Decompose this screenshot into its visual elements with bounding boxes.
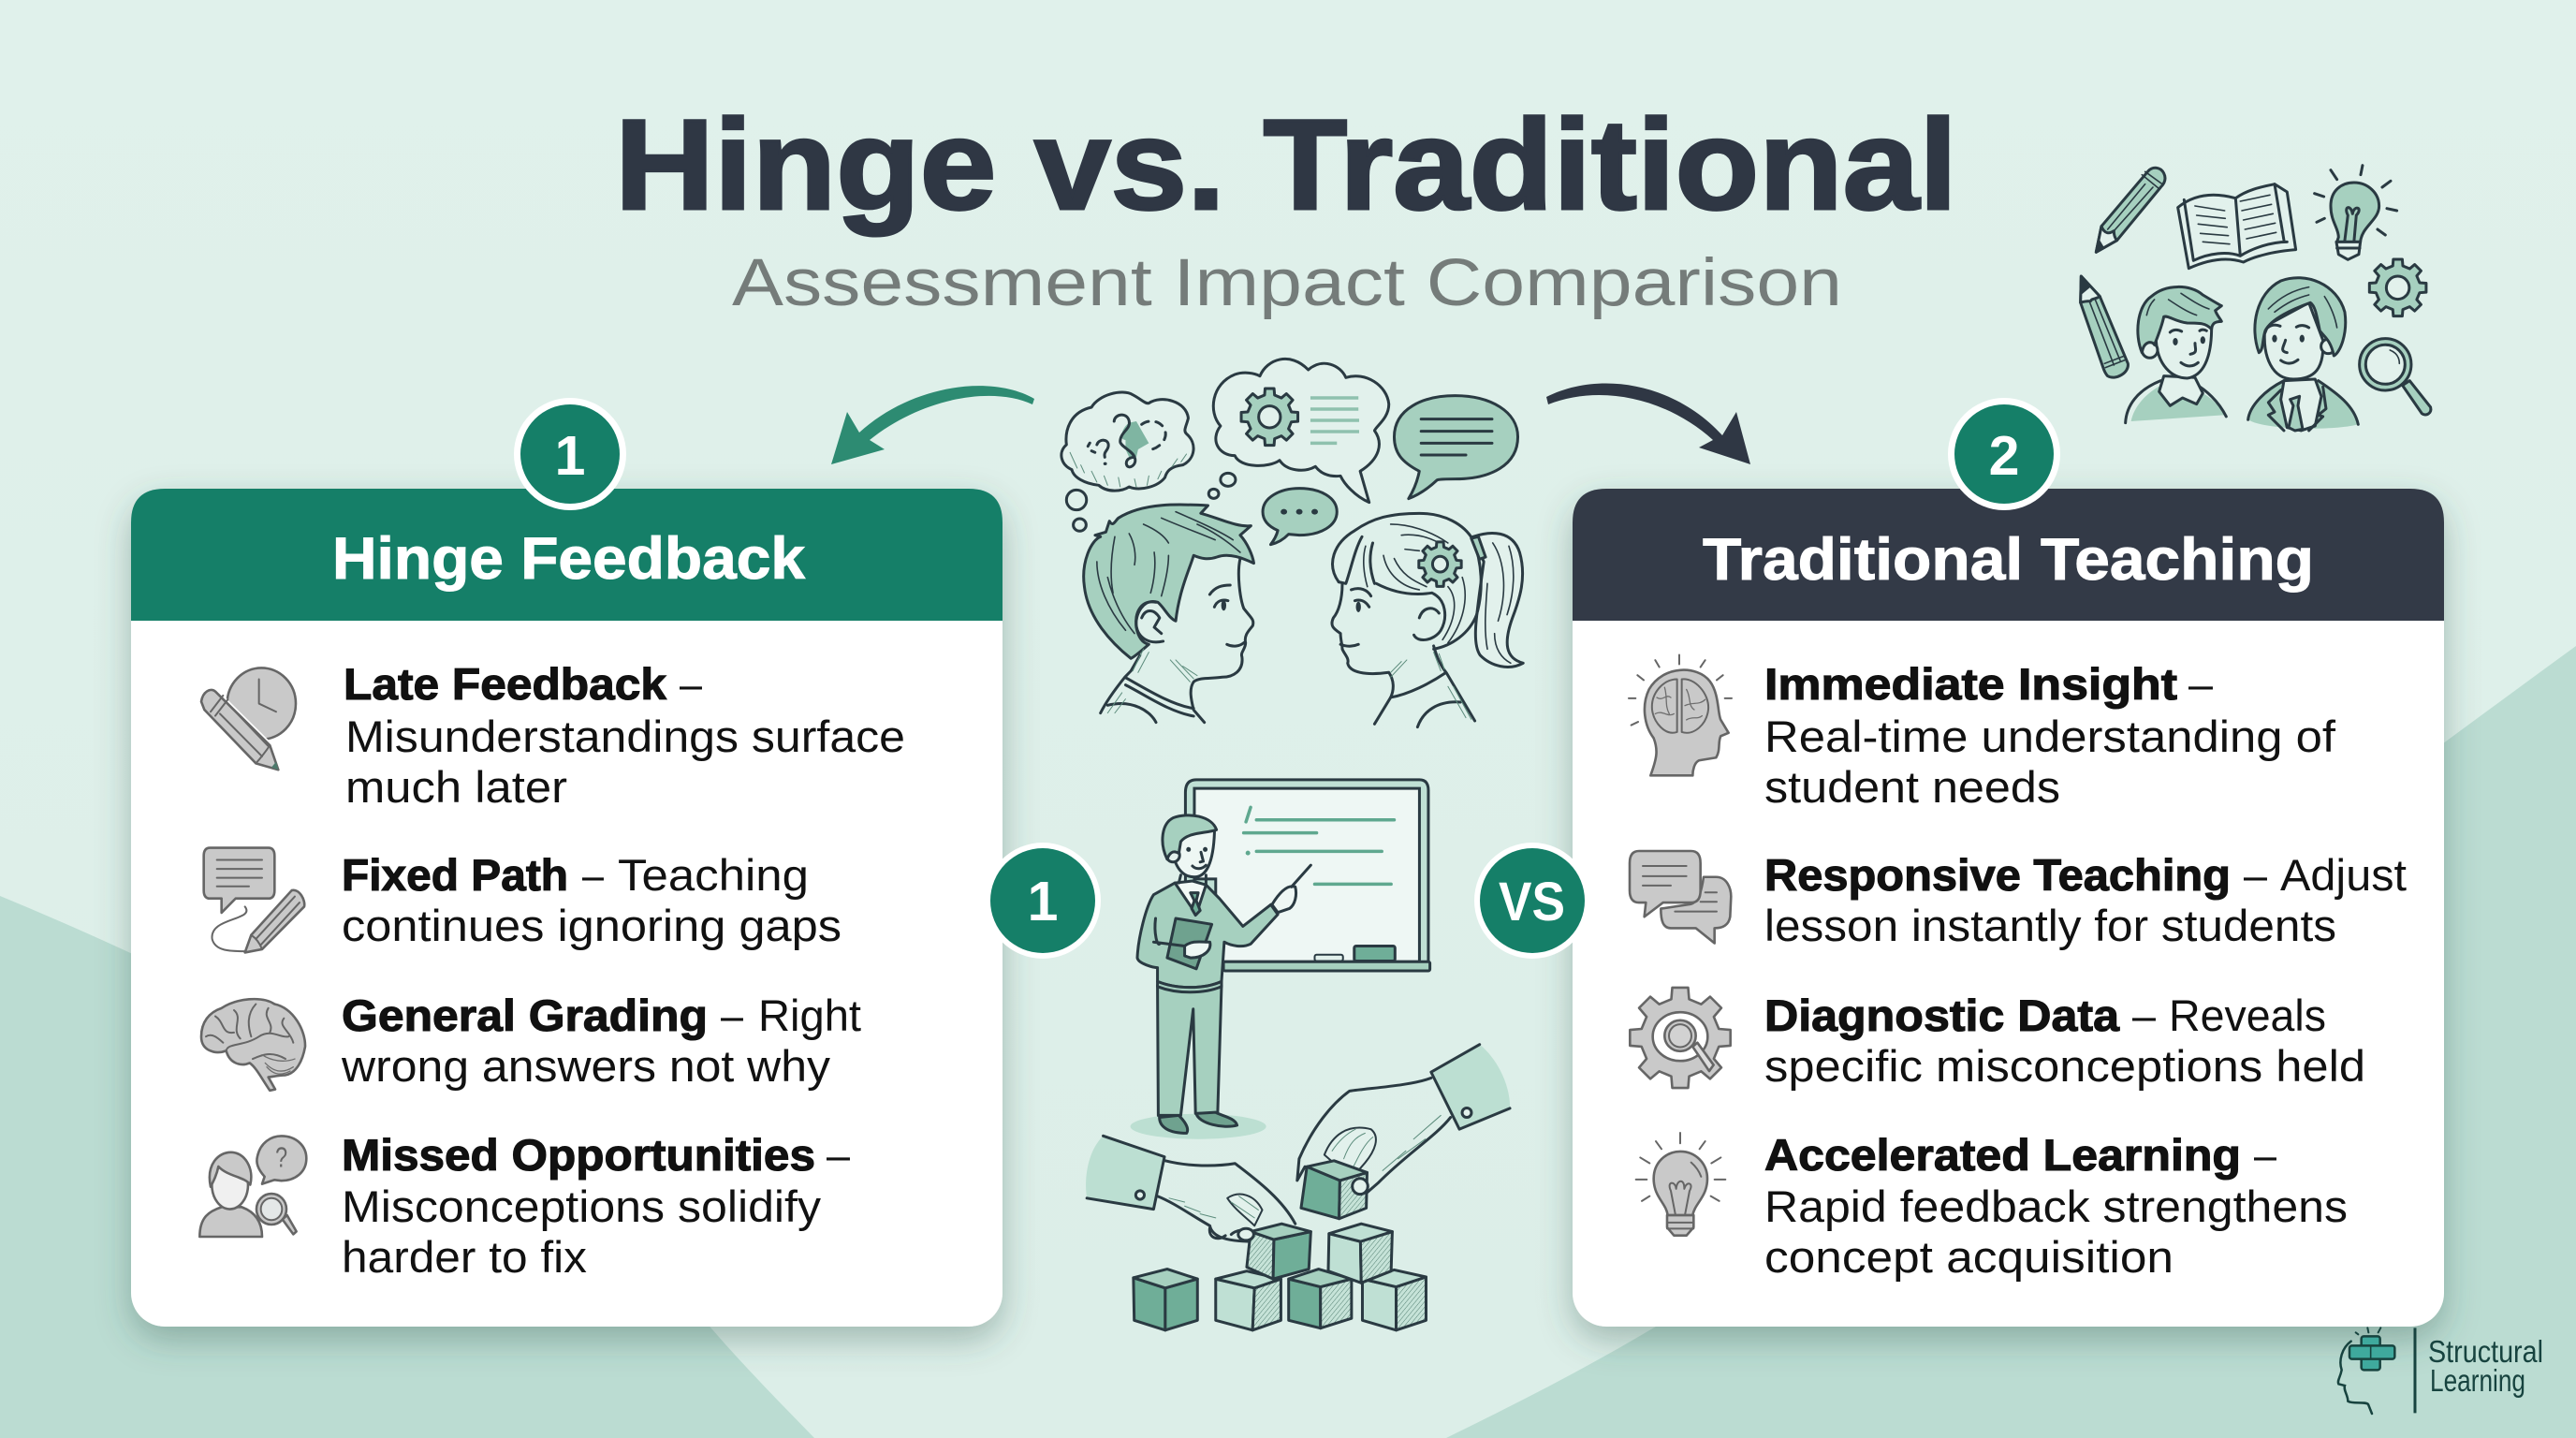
item: General Grading: General Grading — [342, 990, 708, 1040]
icon: light bulb — [2315, 166, 2397, 259]
item: Responsive Teaching: Adjust — [2280, 850, 2407, 900]
subtitle: Assessment Impact Comparison — [732, 246, 1842, 320]
item: Accelerated Learning: concept acquisition — [1764, 1232, 2174, 1282]
item: Immediate Insight — [1629, 655, 2336, 812]
header: Hinge Feedback: Hinge Feedback — [332, 526, 806, 592]
item: Immediate Insight: Real-time understanding of — [1764, 712, 2336, 761]
icon: teacher — [2248, 278, 2358, 431]
illustration: two children with speech bubbles — [1061, 359, 1523, 727]
arrow: to Hinge Feedback — [831, 386, 1034, 464]
arrow: to Traditional Teaching — [1546, 384, 1750, 464]
item: General Grading: wrong answers not why — [341, 1041, 831, 1091]
logo: Structural Learning: Learning — [2430, 1363, 2525, 1398]
item: Responsive Teaching: Responsive Teaching — [1764, 850, 2231, 900]
header: Hinge Feedback — [131, 489, 1003, 621]
badge: 2 above Traditional Teaching: 2 — [1989, 425, 2019, 487]
item: Missed Opportunities: – — [827, 1130, 851, 1180]
teacher figure — [1131, 815, 1310, 1139]
hand right with cuff — [1297, 1045, 1510, 1195]
item: Fixed Path: continues ignoring gaps — [342, 901, 842, 950]
item: Late Feedback: Late Feedback — [344, 659, 667, 709]
item: Missed Opportunities: harder to fix — [342, 1232, 587, 1282]
item: Late Feedback: Misunderstandings surface — [345, 712, 905, 761]
icon: gear with magnifier — [1630, 988, 1731, 1088]
boy profile — [1084, 505, 1253, 723]
panel: Traditional Teaching — [1573, 489, 2444, 1327]
item: Fixed Path: – — [582, 850, 605, 900]
item: Immediate Insight: Immediate Insight — [1764, 659, 2177, 709]
item: Late Feedback — [201, 659, 905, 812]
item: General Grading: – — [721, 990, 744, 1040]
badge: 1 centre left: 1 — [1028, 871, 1058, 932]
icon: student with question: ? — [275, 1140, 287, 1173]
panel: Hinge Feedback — [131, 489, 1003, 1327]
item: Accelerated Learning: Accelerated Learning — [1764, 1130, 2241, 1180]
header: Traditional Teaching — [1573, 489, 2444, 621]
item: Diagnostic Data: specific misconceptions held — [1764, 1041, 2365, 1091]
icon: pencil diagonal — [2096, 168, 2165, 252]
speech bubble: lines — [1394, 396, 1518, 499]
icon: student — [2126, 286, 2226, 423]
item: Responsive Teaching: lesson instantly for students — [1764, 901, 2336, 950]
item: Missed Opportunities: Missed Opportunities — [342, 1130, 815, 1180]
title: Hinge vs. Traditional — [615, 94, 1957, 237]
logo: Structural Learning: Structural — [2428, 1334, 2543, 1369]
icon: gear — [2369, 259, 2426, 316]
badge: VS: VS — [1499, 872, 1565, 932]
icon: light bulb — [1636, 1133, 1725, 1236]
badge: 1 centre left — [985, 843, 1101, 959]
icon: student with question — [199, 1136, 306, 1237]
icon: open book — [2178, 184, 2296, 269]
item: Immediate Insight: – — [2188, 659, 2214, 709]
item: Fixed Path: Fixed Path — [342, 850, 568, 900]
icon: brain — [201, 999, 305, 1091]
item: Diagnostic Data: Reveals — [2169, 990, 2326, 1040]
illustration: school doodles top right — [2081, 166, 2431, 431]
badge: 1 above Hinge Feedback: 1 — [555, 425, 585, 487]
item: Late Feedback: much later — [345, 762, 567, 812]
icon: note and pencil — [204, 848, 304, 952]
item: Late Feedback: – — [680, 659, 703, 709]
whiteboard — [1185, 780, 1430, 971]
badge: 2 above Traditional Teaching — [1948, 398, 2060, 510]
thought bubbles small — [1066, 473, 1236, 531]
thought cloud: gear and notes — [1213, 359, 1389, 503]
item: General Grading: Right — [758, 990, 861, 1040]
item: Missed Opportunities: Misconceptions solidify — [342, 1181, 822, 1231]
thought cloud: confusion — [1061, 392, 1193, 491]
item: Diagnostic Data: Diagnostic Data — [1764, 990, 2120, 1040]
item: Diagnostic Data — [1630, 988, 2365, 1091]
item: Missed Opportunities — [199, 1130, 851, 1282]
icon: magnifying glass — [2360, 339, 2431, 415]
hand left with cuff — [1086, 1136, 1295, 1241]
item: Immediate Insight: student needs — [1764, 762, 2060, 812]
stacked blocks — [1134, 1161, 1426, 1330]
icon: head with brain — [1629, 655, 1732, 775]
icon: pencil upright — [2081, 276, 2128, 377]
item: Responsive Teaching — [1630, 850, 2407, 950]
item: Fixed Path: Teaching — [618, 850, 809, 900]
badge: VS — [1474, 843, 1590, 959]
girl profile — [1332, 513, 1523, 727]
speech bubble: ellipsis — [1263, 489, 1337, 545]
item: Responsive Teaching: – — [2244, 850, 2268, 900]
item: General Grading — [201, 990, 861, 1091]
item: Accelerated Learning — [1636, 1130, 2348, 1282]
header: Traditional Teaching: Traditional Teaching — [1703, 527, 2314, 593]
logo: Structural Learning — [2338, 1328, 2543, 1414]
icon: chat bubbles — [1630, 851, 1731, 943]
item: Accelerated Learning: Rapid feedback strengthens — [1764, 1181, 2348, 1231]
icon: clock and pencil — [201, 668, 296, 770]
badge: 1 above Hinge Feedback — [514, 398, 626, 510]
illustration: teacher at whiteboard and hands with blocks — [1086, 780, 1510, 1330]
item: Fixed Path — [204, 848, 842, 952]
item: Diagnostic Data: – — [2132, 990, 2157, 1040]
item: Accelerated Learning: – — [2254, 1130, 2277, 1180]
